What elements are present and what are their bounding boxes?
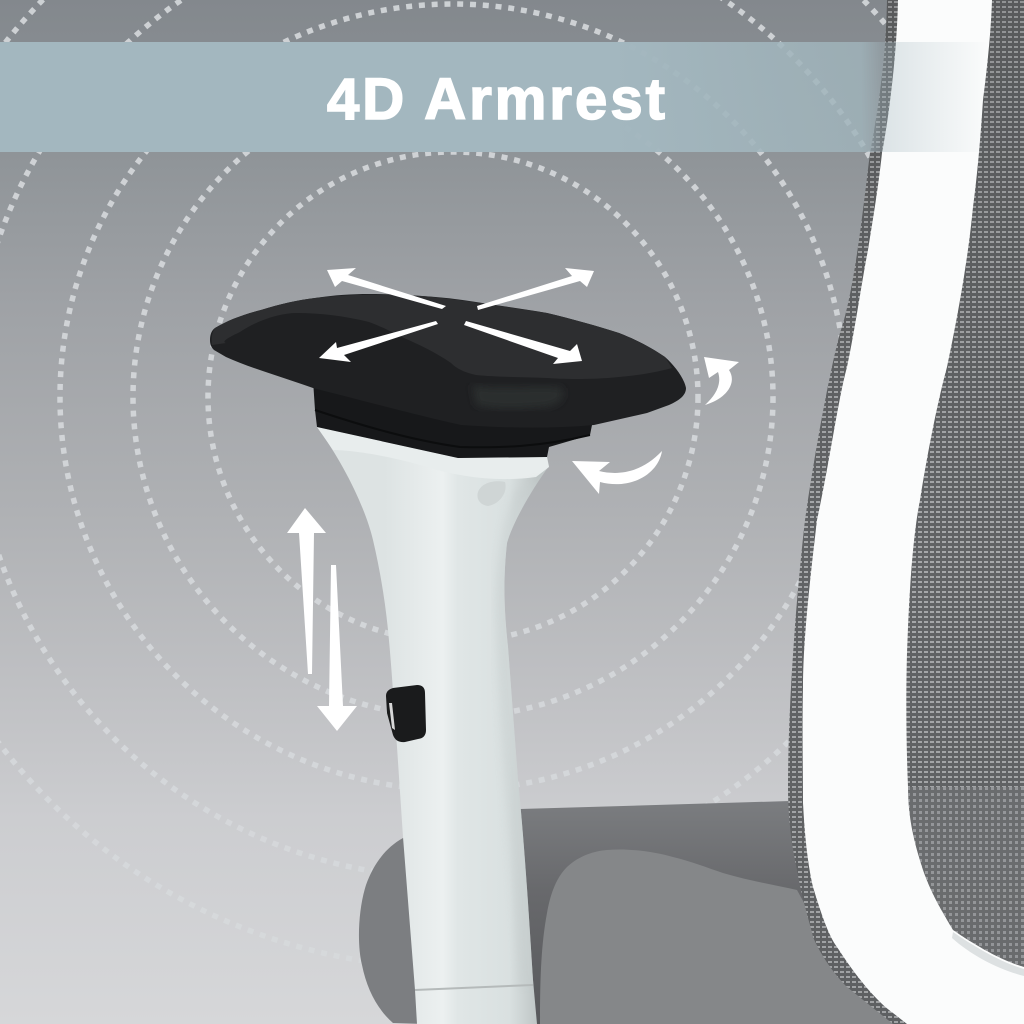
pad stem xyxy=(313,380,594,458)
post collar xyxy=(317,427,549,479)
post screw recess xyxy=(477,481,506,506)
arrows: height up and down xyxy=(287,508,357,731)
pad stem groove xyxy=(315,410,590,447)
pad textured front xyxy=(472,385,563,409)
chair back white frame xyxy=(803,0,1024,1024)
post lower seam xyxy=(415,985,533,990)
title banner xyxy=(0,42,1024,152)
arrow: tilt rotation xyxy=(704,357,739,405)
seat back panel xyxy=(520,801,860,1024)
frame inner shadow xyxy=(952,932,1024,976)
post lever button xyxy=(386,685,426,742)
chair back mesh xyxy=(788,0,1024,1024)
title: 4D Armrest xyxy=(327,67,665,132)
pad body xyxy=(210,294,686,428)
pad top surface xyxy=(212,295,672,379)
post right shading xyxy=(498,516,534,984)
seat cushion xyxy=(359,801,895,1024)
armrest pad xyxy=(210,294,686,458)
seat left lobe xyxy=(359,838,425,1024)
arrow: pivot rotation xyxy=(572,451,662,494)
seat front cushion xyxy=(540,849,895,1024)
armrest post xyxy=(317,427,549,1024)
arrows: four-way horizontal xyxy=(319,268,594,364)
